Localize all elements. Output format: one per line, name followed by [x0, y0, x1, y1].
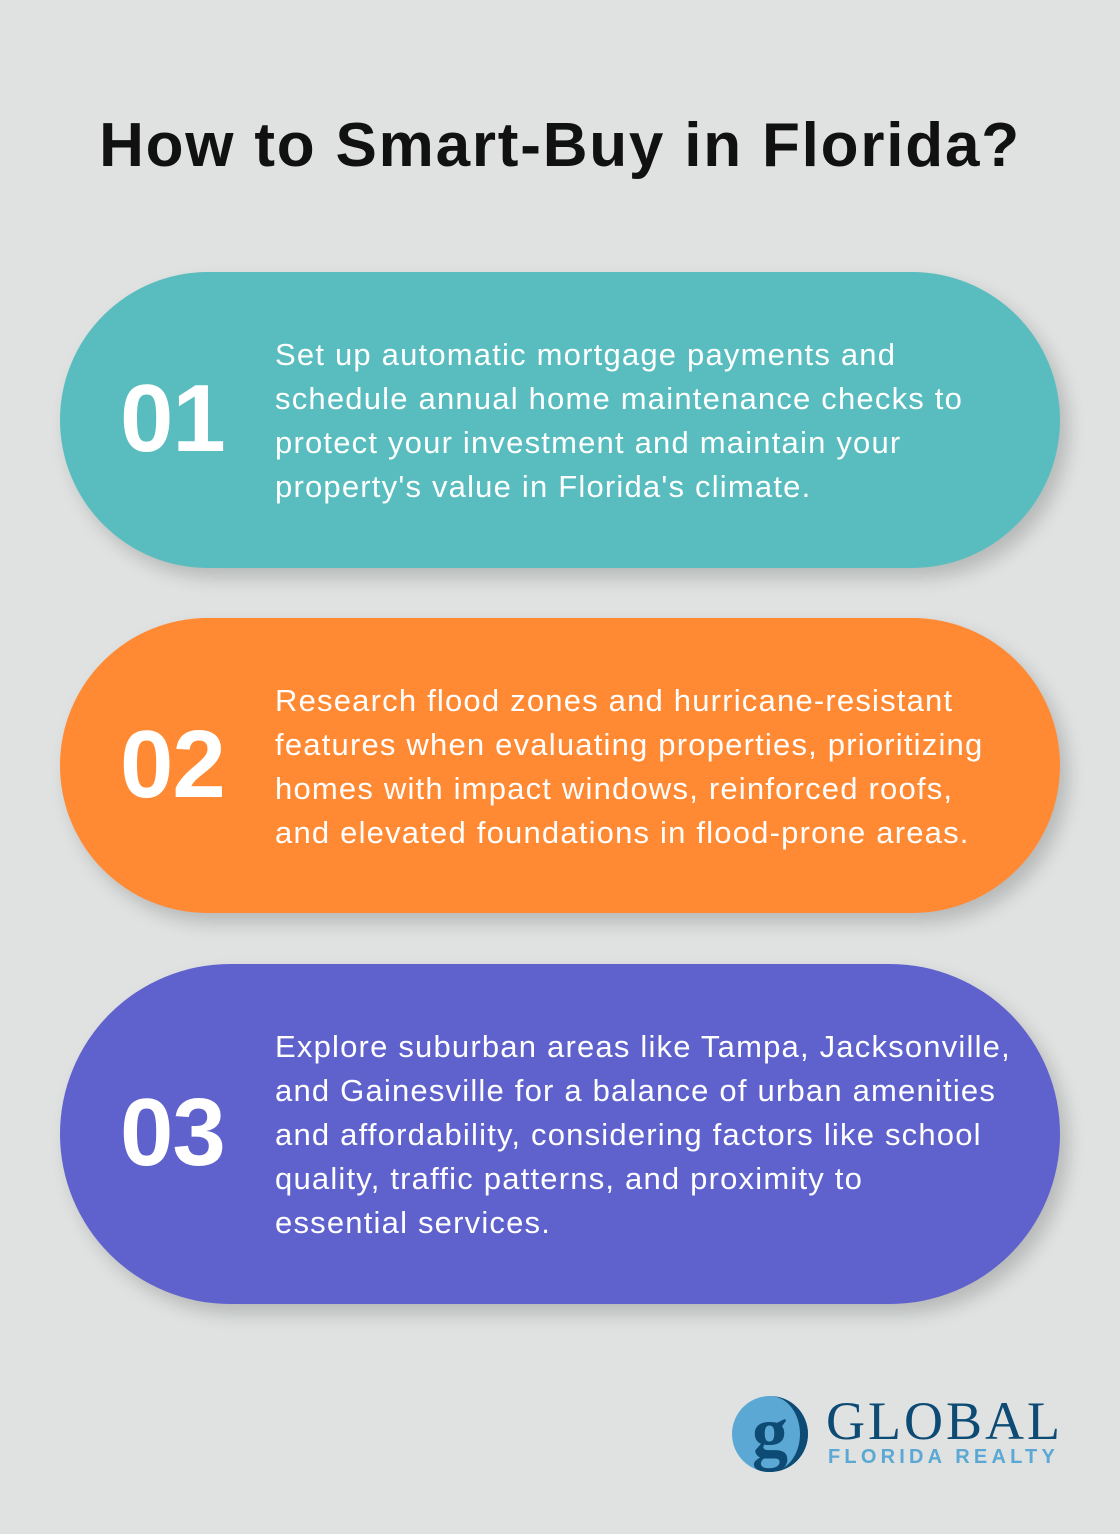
text 02	[275, 683, 983, 850]
logo text FLORIDA REALTY: FLORIDA REALTY	[828, 1446, 1059, 1468]
panel: step 01	[60, 272, 1060, 568]
title: How to Smart-Buy in Florida?	[99, 111, 1021, 180]
logo text GLOBAL: GLOBAL	[826, 1391, 1063, 1451]
number 01: 01	[120, 365, 225, 472]
text 01	[275, 337, 963, 504]
icon: logo circle	[732, 1394, 808, 1472]
text 01: schedule annual home maintenance checks to	[275, 381, 963, 416]
text 01: property's value in Florida's climate.	[275, 469, 811, 504]
text 03: quality, traffic patterns, and proximity to	[275, 1161, 863, 1196]
text 03: essential services.	[275, 1205, 551, 1240]
text 03: and Gainesville for a balance of urban amenities	[275, 1073, 996, 1108]
text 03	[275, 1029, 1011, 1240]
number 02: 02	[120, 711, 225, 818]
text 02: features when evaluating properties, prioritizing	[275, 727, 983, 762]
text 01: protect your investment and maintain your	[275, 425, 901, 460]
text 02: and elevated foundations in flood-prone areas.	[275, 815, 970, 850]
panel: step 03	[60, 964, 1060, 1304]
text 01: Set up automatic mortgage payments and	[275, 337, 896, 372]
text 03: and affordability, considering factors like school	[275, 1117, 982, 1152]
text 03: Explore suburban areas like Tampa, Jacksonville,	[275, 1029, 1011, 1064]
icon: logo circle: g	[752, 1394, 788, 1472]
text 02: Research flood zones and hurricane-resistant	[275, 683, 953, 718]
logo	[732, 1391, 1063, 1472]
panel: step 02	[60, 618, 1060, 913]
text 02: homes with impact windows, reinforced roofs,	[275, 771, 953, 806]
number 03: 03	[120, 1079, 225, 1186]
